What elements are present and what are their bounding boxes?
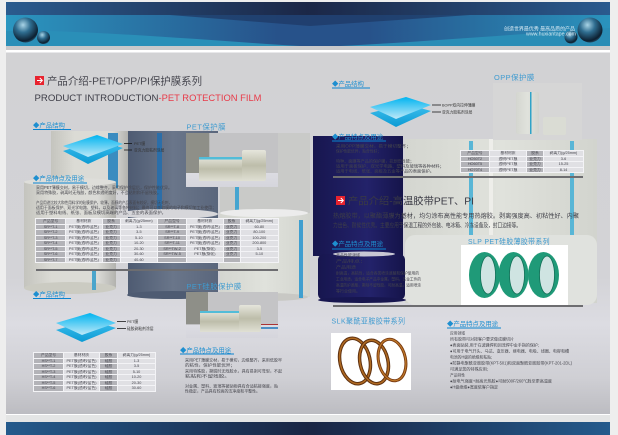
icon: right globes: [564, 18, 602, 44]
panel: PET features: [33, 174, 216, 215]
table: PET silicone film models: 胶系: [105, 353, 112, 357]
table: PET protective film models: SR**T-9: [165, 230, 179, 234]
green roll 1: [469, 252, 500, 298]
panel: PET silicone features: 粘粘和不留残胶。: [185, 372, 230, 378]
panel: OPP features: 采用OPP薄膜交材，易于模切整齐；: [336, 142, 411, 148]
table: PET protective film models: 1-3: [136, 224, 142, 228]
panel: PET silicone structure: [33, 290, 154, 342]
green roll 3: [528, 252, 559, 298]
table: PET silicone film models: 30-60: [132, 386, 141, 390]
table: PET protective film models: SR**T-7: [44, 258, 57, 262]
panel: PET silicone features: 采用PET薄膜交材，易于模切，边缘整齐，采用低胶牢: [185, 356, 282, 362]
table: OPP film models: HO70T4: [468, 168, 482, 172]
table: PET protective film models: 剥离力(g/25mm): [125, 219, 153, 223]
table: PET protective film models: 胶系: [228, 219, 235, 223]
table: PET protective film models: 亚克力: [105, 252, 117, 256]
header slogan: www.huxiantape.com: [526, 32, 576, 38]
panel: OPP features: 适用于电线、纸张、面板及五金等产品的表面保护。: [336, 168, 434, 174]
table: PET protective film models: PET膜(透明/蓝色): [69, 258, 99, 262]
table: PET protective film models: 亚克力: [105, 230, 117, 234]
table: OPP film models: [460, 150, 584, 173]
table: PET silicone film models: PET膜(透明/蓝色): [67, 375, 96, 379]
icon: red arrow: [35, 76, 44, 85]
heading: OPP protective film: OPP保护膜: [494, 73, 535, 82]
photo: PET film rolls: [186, 133, 278, 187]
table: PET protective film models: SR**T-3: [44, 236, 57, 240]
panel: polyimide features: ●耐电气强度+耐高光热胶●可耐500F/260℃胜至更高温度: [450, 378, 552, 384]
table: PET silicone film models: 硅胶: [105, 358, 112, 362]
section title: high temperature tape: 力出色、耐候性优秀。主要应用于保温工程的外包装、电冰箱、冷冻设备及，封口边接等。: [333, 222, 521, 230]
table: PET protective film models: PET膜(透明/蓝色): [190, 236, 220, 240]
diagram: PET layers: 亚克力胶粘剂涂层: [134, 148, 165, 152]
panel: PET features: ◆产品特点及用途: [33, 174, 85, 182]
table: PET silicone film models: PET膜(透明/蓝色): [67, 386, 96, 390]
panel: OPP features: ◆产品特点及用途: [332, 132, 384, 141]
table: PET silicone film models: PET膜(透明/蓝色): [67, 380, 96, 384]
main title: -PET ROTECTION FILM: [158, 93, 262, 103]
section title: high temperature tape: 热熔胶带，以聚酯薄膜为基材，均匀涂布高性能专用热熔胶。剥离强度高、初粘性好、内聚: [333, 212, 579, 220]
main title: 产品介绍-PET/OPP/PI保护膜系列: [47, 74, 202, 88]
table: PET protective film models: 亚克力: [105, 246, 117, 250]
table: PET protective film models: PET膜(钢化): [194, 252, 216, 256]
table: PET protective film models: 胶系: [107, 219, 115, 223]
table: PET protective film models: 亚克力: [105, 224, 117, 228]
background photo: tape rolls: [24, 131, 597, 305]
panel: PET silicone features: 的粘性，保护性能优异；: [185, 362, 235, 368]
table: PET protective film models: 亚克力: [105, 241, 117, 245]
panel: PET silicone features: [180, 346, 282, 394]
panel: PET features: 采用特殊胶，剥离时无残胶，颜色和透明度好，不会粘附和不留残胶。: [36, 189, 161, 195]
table: PET protective film models: SR**T-11: [164, 241, 180, 245]
panel: PET features: 产品用途比较大和性用料学的贴膜保护，较薄，面膜的产品表面有较好，模切无毛刺，: [36, 199, 172, 205]
panel: polyimide features: [447, 319, 573, 390]
panel: OPP features: 适用于面板保护、双光学电路、塑料及玻璃等各种材料；: [336, 162, 444, 168]
table: PET protective film models: 亚克力: [226, 241, 237, 245]
table: PET protective film models: PET膜(透明/蓝色): [69, 224, 99, 228]
table: PET protective film models: PET膜(透明/蓝色): [69, 246, 99, 250]
photo: OPP film rolls: [493, 83, 582, 140]
table: PET protective film models: SR**TW-2: [163, 246, 181, 250]
table: PET protective film models: SR**T-5: [44, 246, 57, 250]
table: OPP film models: 胶系: [531, 151, 539, 155]
table: PET silicone film models: PET膜(透明/蓝色): [67, 370, 96, 374]
table: PET protective film models: 亚克力: [226, 252, 237, 256]
table: PET protective film models: 亚克力: [226, 224, 237, 228]
photo: polyimide tape rolls: [331, 333, 411, 390]
table: PET protective film models: 40-60: [134, 258, 144, 262]
table: OPP film models: 产品型号: [467, 151, 483, 155]
table: PET protective film models: PET膜(透明/蓝色): [69, 252, 99, 256]
panel: polyimide features: 所有胶带可对按客户要求做成膜切片: [450, 336, 514, 342]
table: OPP film models: 透明PET膜: [499, 168, 517, 172]
footer band: [6, 414, 610, 435]
panel: high temperature features: 等行业使用。: [336, 288, 360, 294]
divider bar: [36, 269, 278, 271]
panel: OPP structure: ◆产品结构: [332, 79, 364, 88]
section title: high temperature tape: [333, 194, 579, 230]
table: PET protective film models: 200-800: [252, 241, 266, 245]
panel: PET silicone features: 采用特殊胶，撕脱时无残胶水，具有易剥可弯型，不起: [185, 368, 282, 374]
icon: red arrow: [336, 196, 345, 205]
panel: high temperature features: [332, 239, 421, 294]
panel: polyimide features: 应用领域: [450, 330, 465, 336]
panel: PET silicone features: 性稳定，产品具有较高的洁净度和平整性。: [185, 388, 260, 394]
table: PET silicone film models: PET膜(透明/蓝色): [67, 358, 96, 362]
table: PET protective film models: 20-30: [134, 246, 144, 250]
heading: PET protective film: PET保护膜: [186, 122, 226, 132]
panel: polyimide features: 可满足您的特殊应用;: [450, 366, 488, 372]
main title: [34, 74, 262, 103]
table: PET protective film models: SR**T-2: [44, 230, 57, 234]
panel: high temperature features: 工业用途，适合电子产品中金属，塑料，五金工件的: [336, 276, 421, 282]
heading: SLK polyimide tape: SLK聚酰亚胺胶带系列: [332, 316, 406, 326]
panel: polyimide features: ●防静电聚酰亚胺胶带(KPT-501)和双面聚酰亚胺胶带(KPT-201-2DL): [450, 360, 573, 366]
table: PET protective film models: 亚克力: [105, 236, 117, 240]
photo: green tape rolls: [461, 245, 568, 305]
table: OPP film models: 剥离力(g/25mm): [550, 151, 577, 155]
table: PET protective film models: PET膜(透明/蓝色): [190, 230, 220, 234]
table: PET silicone film models: 硅胶: [105, 386, 112, 390]
panel: polyimide features: ●表面贴装,用于在波峰焊和回流焊中金手指的保护;: [450, 342, 539, 348]
table: PET protective film models: 基材材质: [76, 219, 91, 223]
table: PET silicone film models: 5-10: [133, 370, 140, 374]
diagram: PET layers: [63, 135, 165, 164]
table: PET silicone film models: 产品型号: [41, 353, 56, 357]
table: PET protective film models: PET膜(透明/蓝色): [190, 224, 220, 228]
table: OPP film models: 亚克力: [529, 156, 541, 160]
table: PET silicone film models: 硅胶: [105, 375, 112, 379]
panel: high temperature features: 高温防护遮蔽，撕除不留残胶，可耐高温，适用喷涂: [336, 282, 421, 288]
table: PET silicone film models: HS**T-5: [42, 380, 55, 384]
table: PET protective film models: SR**T-8: [165, 224, 179, 228]
table: PET silicone film models: HS**T-6: [42, 386, 55, 390]
table: OPP film models: 8-14: [560, 168, 567, 172]
diagram: PET silicone layers: 硅胶剥粘剂涂层: [127, 326, 154, 331]
panel: polyimide features: 电池的H级的绝缘和粘贴;: [450, 354, 492, 360]
panel: PET features: 适用于面板保护、双光学电路、塑料，以及玻璃等各种材料；最终可以撕取膜的电子和模切加工业使用；: [36, 204, 216, 210]
panel: polyimide features: ●H级绝缘●宽度依客户指定: [450, 384, 498, 390]
table: PET silicone film models: 1-3: [134, 358, 139, 362]
table: PET protective film models: 30-60: [134, 252, 144, 256]
table: PET silicone film models: HS**T-4: [42, 375, 55, 379]
panel: OPP features: 保护性能优异，贴合性好；: [336, 148, 381, 154]
panel: polyimide features: 产品特性: [450, 372, 465, 378]
table: OPP film models: 透明PET膜: [499, 156, 517, 160]
table: PET protective film models: PET膜(透明/蓝色): [190, 241, 220, 245]
table: PET protective film models: 亚克力: [226, 246, 237, 250]
table: OPP film models: 15-25: [559, 162, 568, 166]
table: PET silicone film models: 硅胶: [105, 364, 112, 368]
table: PET silicone film models: [33, 352, 156, 392]
panel: PET silicone features: ◆产品特点及用途: [180, 346, 232, 354]
heading: SLP PET silicone tape: SLP PET硅胶薄胶带系列: [468, 237, 550, 246]
table: OPP film models: 透明PET膜: [499, 162, 517, 166]
panel: OPP structure: [332, 79, 476, 127]
panel: OPP features: 特种、面膜等产品的保护膜，抗划伤性能；: [336, 158, 414, 164]
panel: PET features: 采用PET薄膜交材，易于模切，边缘整齐，采用保护涂层后，保护性能优异。: [36, 184, 172, 190]
panel: PET structure: ◆产品结构: [33, 120, 65, 130]
table: PET protective film models: 亚克力: [226, 230, 237, 234]
table: PET protective film models: 剥离力(g/25mm): [245, 219, 273, 223]
table: PET silicone film models: 硅胶: [105, 380, 112, 384]
photo: PET silicone film rolls: [186, 292, 278, 338]
table: PET silicone film models: HS**T-1: [42, 358, 55, 362]
header banner: [6, 2, 610, 52]
panel: high temperature features: ◆产品特点及用途: [332, 239, 384, 248]
diagram: PET layers: PET膜: [134, 141, 145, 146]
table: PET protective film models: [35, 218, 279, 263]
table: PET protective film models: 5-10: [135, 236, 143, 240]
table: PET silicone film models: 基材材质: [74, 353, 89, 357]
panel: PET structure: [33, 120, 165, 164]
table: PET silicone film models: 剥离力(g/25mm): [123, 353, 150, 357]
table: PET protective film models: SR**T-1: [44, 224, 57, 228]
table: PET silicone film models: 3-5: [134, 364, 139, 368]
table: PET protective film models: 60-80: [254, 224, 264, 228]
table: PET protective film models: SR**T-6: [44, 252, 57, 256]
diagram: PET silicone layers: PET膜: [127, 319, 138, 324]
table: PET protective film models: 100-200: [252, 236, 266, 240]
table: PET protective film models: 10-20: [134, 241, 144, 245]
main title: PRODUCT INTRODUCTION: [34, 93, 158, 103]
table: PET protective film models: 3-5: [257, 246, 262, 250]
table: PET protective film models: 基材材质: [197, 219, 212, 223]
panel: high temperature features: 产品性能领域: [336, 252, 360, 258]
table: PET protective film models: SR**TW-5: [163, 252, 181, 256]
icon: left globes: [13, 18, 50, 44]
table: OPP film models: HO60T5: [468, 162, 482, 166]
table: OPP film models: 基材材质: [500, 151, 516, 155]
table: PET silicone film models: 20-30: [132, 380, 141, 384]
table: PET protective film models: SR**T-4: [44, 241, 57, 245]
table: PET protective film models: 5-10: [256, 252, 263, 256]
table: PET protective film models: 亚克力: [105, 258, 117, 262]
table: PET silicone film models: HS**T-3: [42, 370, 55, 374]
divider bar: [333, 176, 583, 178]
diagram: OPP layers: 亚克力胶粘剂涂层: [442, 110, 473, 114]
table: PET protective film models: 80-100: [253, 230, 265, 234]
table: PET protective film models: SR**T-10: [164, 236, 180, 240]
table: PET protective film models: PET膜(钢化): [194, 246, 216, 250]
table: PET silicone film models: 10-20: [132, 375, 141, 379]
divider bar: [333, 305, 583, 307]
table: PET silicone film models: HS**T-2: [42, 364, 55, 368]
panel: high temperature features: 产品用途: [336, 264, 356, 270]
panel: polyimide features: ◆产品特点及用途: [447, 319, 499, 328]
table: PET silicone film models: PET膜(透明/蓝色): [67, 364, 96, 368]
panel: PET features: 适用于塑料电线、纸张、面板及模切高端的产品、五金的表面保护。: [36, 209, 166, 215]
table: PET protective film models: PET膜(透明/蓝色): [69, 241, 99, 245]
diagram: PET silicone layers: [56, 313, 154, 342]
table: PET protective film models: PET膜(透明/蓝色): [69, 230, 99, 234]
heading: PET silicone protective film: PET硅胶保护膜: [186, 282, 242, 291]
panel: PET silicone features: 对金属、塑料、玻璃等被贴物具有合适粘接强度，贴: [185, 382, 278, 388]
table: PET protective film models: 亚克力: [226, 236, 237, 240]
section title: high temperature tape: 产品介绍-高温胶带PET、PI: [348, 194, 474, 208]
header slogan: [504, 24, 576, 38]
table: PET silicone film models: 硅胶: [105, 370, 112, 374]
panel: OPP features: [332, 132, 444, 174]
panel: PET silicone structure: ◆产品结构: [33, 290, 65, 298]
table: OPP film models: 亚克力: [529, 162, 541, 166]
panel: high temperature features: 产品特点：: [336, 258, 366, 264]
table: PET protective film models: PET膜(透明/蓝色): [69, 236, 99, 240]
panel: high temperature features: 耐高温，高粘性，适合各类喷涂遮蔽和保护使用的: [336, 270, 419, 276]
table: PET protective film models: 3-5: [136, 230, 142, 234]
green roll 2: [498, 252, 528, 298]
header slogan: 创造世界最优秀 最高品质的产品: [504, 24, 575, 32]
table: PET protective film models: 产品型号: [43, 219, 58, 223]
panel: polyimide features: ●可用于电气开头、马达、变压器、继电器、电吸、线圈、电容和槽: [450, 348, 569, 354]
table: OPP film models: 亚克力: [529, 168, 541, 172]
table: PET protective film models: 产品型号: [164, 219, 180, 223]
table: OPP film models: 3-6: [561, 156, 566, 160]
diagram: OPP layers: [370, 97, 476, 127]
diagram: OPP layers: BOPP双向拉伸薄膜: [442, 102, 476, 108]
table: OPP film models: HO50T2: [468, 156, 482, 160]
